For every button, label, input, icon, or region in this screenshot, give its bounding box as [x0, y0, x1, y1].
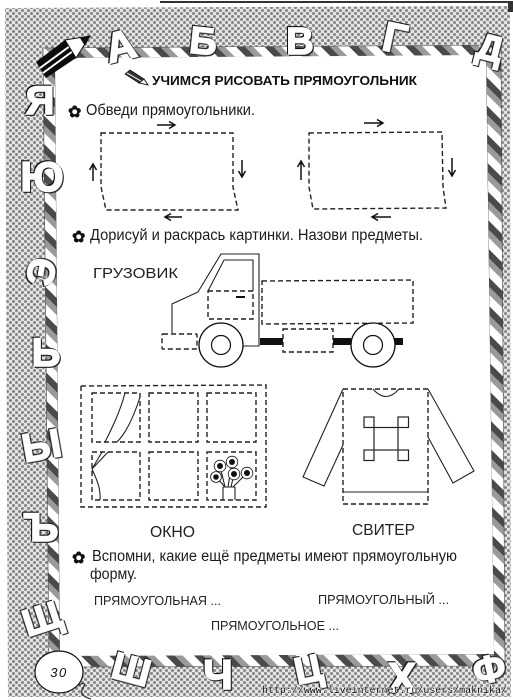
- rear wheel: [351, 323, 395, 367]
- arrow right: [157, 122, 175, 128]
- page number badge: [35, 651, 91, 699]
- alphabet letters around the border: Э: [19, 255, 65, 289]
- label: sweater: СВИТЕР: [352, 522, 415, 539]
- front wheel: [199, 323, 243, 367]
- arrow up: [90, 164, 96, 181]
- task 2 heading: Дорисуй и раскрась картинки. Назови предметы.: [90, 227, 423, 244]
- task 1 heading: Обведи прямоугольники.: [86, 102, 255, 119]
- sweater pattern: [364, 417, 408, 460]
- alphabet letters around the border: Д: [473, 25, 507, 71]
- alphabet letters around the border: Ф: [469, 646, 510, 694]
- alphabet letters around the border: Ю: [20, 153, 64, 200]
- pencil corner icon: [36, 36, 90, 78]
- arrow down: [448, 158, 456, 176]
- alphabet letters around the border: Щ: [17, 594, 67, 646]
- left sleeve: [303, 389, 343, 486]
- alphabet letters around the border: Ы: [19, 421, 65, 471]
- page number badge: 30: [50, 665, 68, 680]
- arrow down: [238, 160, 246, 177]
- alphabet letters around the border: А: [100, 19, 141, 72]
- scan edge shadow: [160, 1, 513, 12]
- alphabet letters around the border: Х: [388, 654, 416, 700]
- alphabet letters around the border: Б: [187, 20, 219, 64]
- answer prompts: ПРЯМОУГОЛЬНАЯ ...: [94, 594, 221, 608]
- task 3 text: [72, 548, 457, 583]
- alphabet letters around the border: Ц: [291, 647, 327, 694]
- alphabet letters around the border: Ш: [107, 645, 155, 696]
- task 1 heading: ✿: [68, 102, 81, 121]
- right sleeve: [428, 389, 474, 483]
- white content panel: [55, 55, 494, 656]
- alphabet letters around the border: Ч: [203, 651, 233, 698]
- watermark url: http://www.liveinternet.ru/users/maknika/: [262, 685, 507, 697]
- truck drawing: [162, 254, 413, 367]
- alphabet letters around the border: Я: [26, 79, 54, 123]
- title: УЧИМСЯ РИСОВАТЬ ПРЯМОУГОЛЬНИК: [152, 73, 417, 88]
- task 3 text: ✿: [72, 548, 85, 567]
- alphabet letters around the border: В: [286, 21, 314, 63]
- task 2 heading: ✿: [72, 227, 85, 246]
- alphabet letters around the border: Ъ: [24, 506, 58, 550]
- curtains: [92, 393, 140, 500]
- answer prompts: ПРЯМОУГОЛЬНОЕ ...: [211, 619, 339, 633]
- task 3 text: форму.: [90, 566, 137, 583]
- label: truck: ГРУЗОВИК: [93, 265, 178, 282]
- answer prompts: [94, 592, 449, 633]
- arrow left: [165, 214, 182, 220]
- label: window: ОКНО: [150, 524, 195, 541]
- arrow up: [298, 161, 304, 180]
- answer prompts: ПРЯМОУГОЛЬНЫЙ ...: [318, 592, 449, 607]
- icon: title pencil: [125, 70, 148, 85]
- alphabet letters around the border: Ь: [32, 331, 60, 375]
- sweater drawing: [303, 389, 474, 504]
- arrow left: [372, 214, 391, 220]
- arrow right: [364, 120, 383, 126]
- dashed rectangle 1 with arrows: [90, 122, 246, 220]
- window drawing: [81, 385, 266, 507]
- alphabet letters around the border: Г: [378, 12, 412, 63]
- task 3 text: Вспомни, какие ещё предметы имеют прямоугольную: [92, 548, 457, 565]
- dashed rectangle 2 with arrows: [298, 120, 456, 220]
- flowers in vase: [211, 456, 253, 500]
